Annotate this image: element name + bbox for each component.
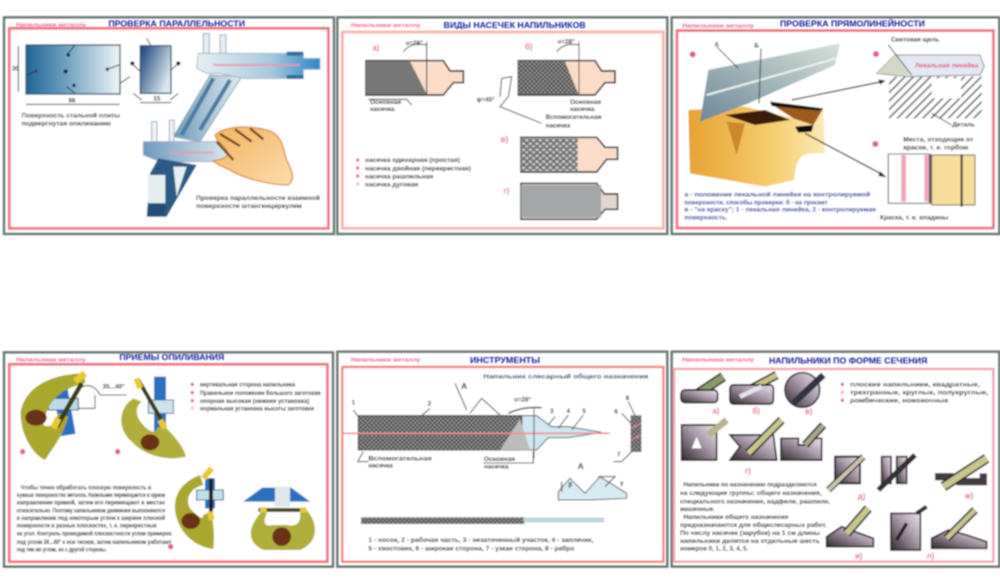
icon: section k	[891, 507, 927, 550]
caption: file parts: 1 - носок, 2 - рабочая часть, 3 - незаточенный участок, 4 - заплечик,	[368, 536, 594, 544]
drawing: file cross section: 8	[626, 395, 630, 402]
panel: parallelism check: подвергнутая опиливанию	[22, 121, 112, 128]
drawing: steel plate side: 15	[153, 96, 161, 103]
caption: straightness check	[684, 190, 876, 221]
icon: square file: б)	[752, 406, 760, 415]
drawing: worker view a	[20, 373, 85, 460]
text block: filing technique description: нужных поверхностях металла. Напильник перемещается в одном	[17, 492, 165, 499]
panel: straightness check	[672, 17, 999, 234]
drawing: worker view b	[115, 377, 186, 458]
drawing: file top view: А	[461, 381, 468, 391]
drawing: file a single cut: насечка	[370, 106, 395, 113]
icon: section i: и)	[855, 551, 863, 560]
text block: file classification: машинные.	[680, 506, 715, 513]
drawing: convex and concave detail	[872, 137, 975, 221]
drawing: section with light gap: Световая щель	[891, 37, 939, 44]
icon: half-round file	[730, 420, 782, 460]
drawing: file top view: 5	[582, 408, 586, 415]
section label: Напильники металлу	[351, 23, 421, 29]
icon: section d	[828, 457, 866, 501]
subheading: Напильник слесарный общего назначения	[483, 373, 648, 381]
drawing: steel block	[147, 158, 197, 217]
icon: flat file: а)	[712, 406, 720, 415]
icon: square file	[730, 375, 777, 415]
drawing: file double cut: насечка	[570, 106, 595, 113]
drawing: steel plate front	[12, 45, 130, 105]
icon: round file: в)	[805, 407, 813, 416]
drawing: file cross section: 7	[617, 451, 621, 458]
caption: straightness check: поверхности, способы проверки: б - на просвет	[684, 198, 828, 206]
caption: plate surface: Поверхность стальной плиты	[22, 112, 120, 120]
legend: file cross sections: плоские напильники, квадратные,	[850, 381, 980, 388]
drawing: caliper	[143, 33, 320, 162]
text block: file classification: предназначаются для общеслесарных работ.	[680, 521, 827, 529]
drawing: file double cut: Основная	[570, 99, 601, 106]
drawing: file double cut: б)	[525, 42, 533, 51]
icon: section i	[827, 508, 873, 560]
text block: file classification: на следующие группы: общего назначения,	[680, 489, 822, 497]
text block: file classification: специального назначения, надфили, рашпили,	[680, 498, 830, 505]
caption: main cut	[483, 452, 533, 470]
icon: section zh	[935, 458, 987, 500]
text block: filing technique description: под тем же углом, но с другой стороны.	[17, 546, 107, 554]
drawing: worker view d	[251, 487, 315, 550]
drawing: tooth detail A: γ	[620, 480, 624, 487]
drawing: file double cut: υ=28°	[558, 38, 575, 46]
drawing: wooden workpiece with straightedge: Б	[754, 42, 759, 49]
section label: Напильники металлу	[682, 358, 755, 364]
heading: НАПИЛЬНИКИ ПО ФОРМЕ СЕЧЕНИЯ	[769, 356, 927, 366]
drawing: file arc cut: г)	[503, 186, 510, 195]
drawing: file cross section	[613, 395, 641, 462]
drawing: file a single cut: Основная	[370, 99, 401, 106]
drawing: tooth detail A	[558, 461, 627, 500]
drawing: file a single cut	[366, 39, 463, 113]
icon: section zh: ж)	[964, 491, 974, 500]
drawing: wooden workpiece with straightedge	[688, 42, 840, 187]
drawing: file rasp cut	[501, 135, 618, 172]
icon: section l: л)	[927, 551, 935, 560]
drawing: file a single cut: υ=28°	[406, 39, 423, 47]
caption: main cut: Основная	[484, 456, 515, 463]
drawing: convex and concave detail: Места, отходящие от	[903, 137, 973, 144]
text block: file classification: напильники делятся на отдельные шесть	[680, 538, 820, 545]
caption: straightness check: а - положение лекальной линейки на контролируемой	[684, 190, 870, 198]
heading: ПРОВЕРКА ПРЯМОЛИНЕЙНОСТИ	[780, 17, 925, 28]
legend: stance: нормальная установка высоты заготовки	[200, 406, 314, 413]
panel: parallelism check: поверхности штангенциркулем	[196, 203, 302, 210]
text block: file classification: По числу насечек (зарубок) на 1 см длины	[680, 529, 820, 537]
drawing: steel plate front: 96	[68, 98, 76, 105]
heading: ПРИЕМЫ ОПИЛИВАНИЯ	[119, 352, 224, 362]
drawing: file a single cut: а)	[372, 44, 380, 53]
arrows: to detail views	[792, 79, 887, 177]
text block: filing technique description: поверхности в разных плоскостях, т. е. перекрестные	[17, 523, 157, 530]
icon: section l	[927, 510, 987, 560]
drawing: steel plate side	[130, 38, 180, 103]
drawing: convex and concave detail: краски, т. е. горбом	[903, 143, 969, 151]
caption: straightness check: в - "на краску"; 1 - лекальная линейка, 2 - контролируемая	[684, 206, 876, 214]
drawing: file double cut: ψ=45°	[477, 96, 495, 104]
caption: straightness check: поверхность.	[684, 214, 728, 221]
drawing: file double cut	[477, 38, 615, 129]
drawing: file top view: 1	[352, 399, 356, 406]
caption: parallelism check: Проверка параллельности взаимной	[196, 194, 320, 202]
drawing: hand	[213, 127, 293, 185]
text block: filing technique description: в направлении под некоторым углом к ширине плоской	[17, 514, 165, 522]
drawing: angle mark	[78, 382, 127, 408]
caption: main cut: насечка	[484, 463, 509, 470]
drawing: file top view: 4	[567, 408, 571, 415]
icon: square slot file: г)	[745, 466, 751, 475]
legend: stance	[191, 382, 321, 413]
icon: flat file	[681, 377, 723, 415]
drawing: section with light gap	[873, 37, 984, 129]
text block: filing technique description: Чтобы точно обработать плоскую поверхность в	[21, 483, 151, 491]
drawing: convex and concave detail: Краска, т. е. впадины	[880, 214, 948, 221]
drawing: file top view: 2	[428, 401, 432, 408]
drawing: file arc cut	[503, 183, 618, 219]
caption: file parts: 5 - хвостовик, 6 - широкая сторона, 7 - узкая сторона, 8 - ребро	[368, 545, 574, 553]
text block: filing technique description: под углом 30...40° к оси тисков, затем напильником работают	[17, 538, 172, 546]
drawing: file top view	[343, 381, 610, 458]
legend: file cross sections	[841, 381, 989, 404]
drawing: file rasp cut: в)	[501, 135, 509, 144]
drawing: steel plate front: 30	[12, 66, 20, 73]
drawing: file double cut: насечка	[546, 122, 571, 129]
drawing: worker view c	[168, 468, 223, 549]
panel: file cut types	[337, 17, 667, 234]
legend: cut types: насечка рашпильная	[365, 173, 434, 180]
drawing: tooth detail A: А	[578, 461, 585, 471]
panel: tools	[337, 352, 667, 567]
heading: ПРОВЕРКА ПАРАЛЛЕЛЬНОСТИ	[108, 18, 245, 28]
legend: cut types: насечка дуговая	[365, 181, 419, 188]
section label: Напильники металлу	[16, 357, 87, 363]
caption: secondary cut	[358, 452, 432, 470]
icon: section e	[878, 455, 915, 490]
legend: cut types: насечка одинарная (простая)	[365, 157, 460, 164]
icon: triangular file	[682, 420, 727, 460]
drawing: file side view	[361, 517, 603, 524]
drawing: file top view: υ=28°	[514, 396, 531, 404]
drawing: file double cut: Вспомогательная	[546, 114, 602, 121]
caption: secondary cut: Вспомогательная	[368, 455, 432, 462]
text block: filing technique description: относительно. Поэтому напильником движения выполняются	[17, 507, 165, 514]
text block: filing technique description: направлении прямой, затем его перемещают в местах	[17, 499, 165, 507]
text block: file classification: Напильники по назначению подразделяются	[683, 482, 817, 489]
section label: Напильники металлу	[16, 22, 87, 28]
legend: file cross sections: трехгранные, круглые, полукруглые,	[850, 389, 989, 396]
legend: stance: Правильное положение большого заготовки	[200, 389, 321, 397]
icon: section d: д)	[858, 492, 866, 501]
icon: square slot file	[745, 425, 823, 475]
legend: file cross sections: ромбические, ножовочные	[850, 396, 949, 404]
panel: filing techniques	[4, 352, 333, 567]
text block: filing technique description: на угол. Контроль проводимой плоскостности углом примерно	[17, 529, 172, 537]
panel: parallelism check	[4, 17, 334, 234]
text block: filing technique description	[17, 483, 172, 554]
panel: files by cross section	[672, 352, 999, 567]
drawing: wooden workpiece with straightedge: А	[714, 42, 719, 49]
text block: file classification: Напильники общего назначения	[683, 513, 789, 521]
legend: cut types	[356, 157, 471, 188]
drawing: tooth detail A: β	[568, 482, 572, 489]
legend: cut types: насечка двойная (перекрестная)	[365, 164, 471, 172]
icon: round file	[785, 373, 823, 416]
drawing: section with light gap: Деталь	[952, 122, 975, 129]
section label: Напильники металлу	[682, 23, 755, 29]
text block: file classification	[680, 482, 830, 553]
legend: stance: вертикальная сторона напильника	[200, 382, 295, 389]
drawing: angle mark: 35...40°	[103, 382, 125, 390]
text block: file classification: номеров 0, 1, 2, 3, 4, 5.	[680, 546, 749, 553]
heading: ИНСТРУМЕНТЫ	[470, 355, 540, 365]
caption: file parts	[368, 536, 594, 553]
drawing: section with light gap: Лекальная линейка	[915, 63, 979, 70]
heading: ВИДЫ НАСЕЧЕК НАПИЛЬНИКОВ	[444, 20, 586, 30]
caption: secondary cut: насечка	[368, 463, 393, 470]
section label: Напильники металлу	[351, 358, 421, 364]
legend: stance: опорная высокая (нижняя установка)	[200, 398, 309, 405]
drawing: file top view: 3	[550, 408, 554, 415]
drawing: file cross section: 6	[614, 409, 618, 416]
